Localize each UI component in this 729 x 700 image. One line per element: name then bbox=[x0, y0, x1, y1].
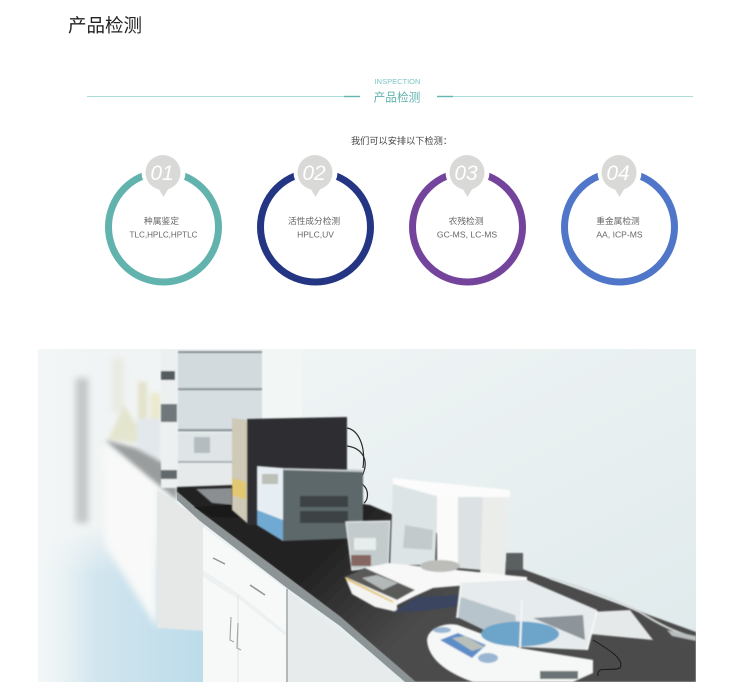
bench steel edge bbox=[177, 492, 415, 682]
intro line: 我们可以安排以下检测： bbox=[351, 135, 452, 146]
step 01 ring bbox=[108, 150, 218, 282]
beaker bbox=[346, 521, 390, 570]
step 02 ring: 02 bbox=[302, 162, 326, 185]
lower cabinet front bbox=[203, 527, 287, 682]
small instruments behind rack bbox=[108, 382, 161, 460]
step 04 ring: AA, ICP-MS bbox=[596, 230, 643, 240]
blurred back cabinets bbox=[75, 358, 157, 628]
step 01 ring: 种属鉴定 bbox=[144, 215, 179, 226]
floor haze bbox=[60, 525, 208, 562]
voltage regulator bbox=[257, 466, 363, 541]
analytical balance bbox=[345, 478, 527, 612]
back cabinet side bbox=[157, 490, 205, 631]
laboratory photo illustration bbox=[38, 349, 696, 682]
step 04 ring bbox=[564, 150, 674, 282]
paper and white cable bbox=[550, 578, 696, 641]
bench top bbox=[177, 485, 696, 682]
balance cord bbox=[593, 640, 621, 676]
step 03 ring: 03 bbox=[454, 162, 478, 185]
step 04 ring: 04 bbox=[606, 162, 630, 185]
top-loading balance bbox=[427, 580, 597, 682]
step 02 ring: HPLC,UV bbox=[297, 230, 334, 240]
cables bbox=[347, 428, 368, 503]
section heading bbox=[87, 77, 693, 104]
page title: 产品检测 bbox=[68, 15, 142, 36]
step 02 ring: 活性成分检测 bbox=[288, 215, 340, 226]
floor bbox=[66, 538, 203, 682]
left fade bbox=[74, 380, 84, 522]
step 03 ring: GC-MS, LC-MS bbox=[437, 230, 497, 240]
keyboard bbox=[196, 488, 232, 505]
lower cabinet side bbox=[288, 591, 404, 682]
instrument box behind balance bbox=[505, 553, 523, 570]
step 03 ring bbox=[412, 150, 522, 282]
section heading: INSPECTION bbox=[375, 77, 420, 86]
blurred far bench bbox=[105, 440, 177, 500]
step 02 ring bbox=[260, 150, 370, 282]
step 03 ring: 农残检测 bbox=[449, 215, 484, 226]
section heading: 产品检测 bbox=[374, 90, 420, 104]
step 01 ring: 01 bbox=[150, 162, 174, 185]
step 01 ring: TLC,HPLC,HPTLC bbox=[130, 230, 198, 240]
step 04 ring: 重金属检测 bbox=[596, 215, 640, 226]
instrument rack bbox=[161, 349, 262, 488]
mouse pad bbox=[194, 505, 242, 518]
computer tower bbox=[232, 417, 347, 525]
